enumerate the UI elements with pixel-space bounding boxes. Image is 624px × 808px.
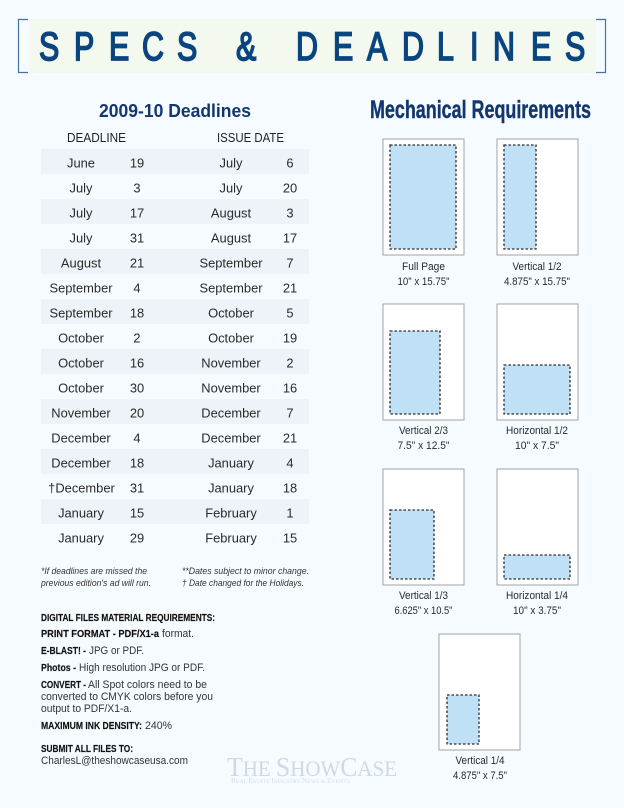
ad size: full page xyxy=(383,139,464,288)
ad size: vertical 1/4: Vertical 1/4 xyxy=(456,755,504,767)
table rows: 29 xyxy=(130,530,144,546)
digital file requirements xyxy=(41,612,215,732)
digital file requirements: Photos - xyxy=(41,662,76,674)
table rows: July xyxy=(220,156,243,170)
table rows: July xyxy=(70,206,93,220)
ad size: horizontal 1/4: Horizontal 1/4 xyxy=(506,590,568,602)
table rows: January xyxy=(58,530,104,546)
table rows: 16 xyxy=(283,380,297,396)
table rows: September xyxy=(49,280,113,296)
table rows: September xyxy=(49,306,113,320)
table rows: 3 xyxy=(286,206,294,220)
table rows: 18 xyxy=(283,480,297,496)
table rows: December xyxy=(51,456,111,470)
table rows: December xyxy=(51,430,111,446)
digital file requirements: E-BLAST! - xyxy=(41,645,86,657)
digital file requirements: DIGITAL FILES MATERIAL REQUIREMENTS: xyxy=(41,612,215,624)
table rows: 20 xyxy=(283,180,297,196)
ad size: horizontal 1/4 xyxy=(497,469,578,617)
table rows: November xyxy=(51,406,111,420)
table rows: 7 xyxy=(286,256,294,270)
table rows: September xyxy=(199,280,263,296)
submission contact: SUBMIT ALL FILES TO: xyxy=(41,743,133,755)
table rows: February xyxy=(205,506,257,520)
ad size: vertical 1/4 xyxy=(439,634,520,782)
table rows: 19 xyxy=(283,330,297,346)
ad size: full page: Full Page xyxy=(402,261,445,273)
table rows: 20 xyxy=(130,406,144,420)
logo: the showcase: THE SHOWCASE xyxy=(227,752,397,782)
table rows: January xyxy=(208,456,254,470)
table rows: †December xyxy=(48,480,116,496)
ad size: horizontal 1/4: 10" x 3.75" xyxy=(513,605,561,617)
table rows: August xyxy=(211,206,251,220)
table rows: October xyxy=(58,380,105,396)
table rows: September xyxy=(199,256,263,270)
ad size: vertical 1/3: 6.625" x 10.5" xyxy=(394,605,453,617)
table rows: December xyxy=(201,406,261,420)
footnotes: previous edition's ad will run. xyxy=(40,578,151,589)
table rows: 5 xyxy=(286,306,294,320)
ad size: vertical 1/2 xyxy=(497,139,578,288)
digital file requirements: High resolution JPG or PDF. xyxy=(79,662,205,674)
table rows: October xyxy=(208,330,255,346)
table rows: November xyxy=(201,356,261,370)
digital file requirements: All Spot colors need to be xyxy=(88,679,207,691)
ad size: vertical 1/3: Vertical 1/3 xyxy=(399,590,448,602)
table rows: February xyxy=(205,530,257,546)
footnotes: † Date changed for the Holidays. xyxy=(182,578,304,589)
ad size: horizontal 1/2 xyxy=(497,304,578,452)
ad size: vertical 1/2: 4.875" x 15.75" xyxy=(504,276,570,288)
ad size: vertical 1/3 xyxy=(383,469,464,617)
table rows: 4 xyxy=(286,456,294,470)
digital file requirements: CONVERT - xyxy=(41,679,86,691)
footnotes: *If deadlines are missed the xyxy=(41,566,147,577)
table rows: October xyxy=(58,330,105,346)
table rows: July xyxy=(70,230,93,246)
ad size: horizontal 1/2: 10" x 7.5" xyxy=(515,440,559,452)
table rows: 15 xyxy=(130,506,144,520)
table rows: January xyxy=(58,506,104,520)
table rows: 21 xyxy=(283,280,297,296)
table rows: 18 xyxy=(130,456,144,470)
table rows: 15 xyxy=(283,530,297,546)
table rows: 21 xyxy=(283,430,297,446)
digital file requirements: format. xyxy=(162,628,194,640)
deadlines table xyxy=(41,131,309,546)
table rows: 17 xyxy=(283,230,297,246)
table rows: 16 xyxy=(130,356,144,370)
table rows: January xyxy=(208,480,254,496)
table rows: August xyxy=(211,230,251,246)
table rows: 31 xyxy=(130,230,144,246)
table rows: 2 xyxy=(286,356,294,370)
table rows: July xyxy=(220,180,243,196)
table rows: 4 xyxy=(133,430,141,446)
footnotes xyxy=(40,566,309,589)
table rows: October xyxy=(58,356,105,370)
table rows: 2 xyxy=(133,330,141,346)
table rows: 3 xyxy=(133,180,141,196)
table rows xyxy=(48,156,297,546)
table rows: 17 xyxy=(130,206,144,220)
table rows: 30 xyxy=(130,380,144,396)
footnotes: **Dates subject to minor change. xyxy=(182,566,309,577)
submission contact: CharlesL@theshowcaseusa.com xyxy=(41,755,188,767)
table rows: July xyxy=(70,180,93,196)
table rows: 31 xyxy=(130,480,144,496)
digital file requirements: MAXIMUM INK DENSITY: xyxy=(41,720,142,732)
table rows: 1 xyxy=(286,506,294,520)
ad size: vertical 2/3: Vertical 2/3 xyxy=(399,425,448,437)
digital file requirements: PRINT FORMAT - PDF/X1-a xyxy=(41,628,159,640)
title: SPECS&DEADLINES xyxy=(39,24,585,69)
digital file requirements: JPG or PDF. xyxy=(89,645,144,657)
ad size: full page: 10" x 15.75" xyxy=(398,276,450,288)
table rows: 7 xyxy=(286,406,294,420)
table rows: June xyxy=(67,156,95,170)
digital file requirements: 240% xyxy=(145,720,172,732)
table rows: December xyxy=(201,430,261,446)
ad size: vertical 1/4: 4.875" x 7.5" xyxy=(453,770,507,782)
table rows: 21 xyxy=(130,256,144,270)
logo: the showcase: REAL ESTATE INDUSTRY NEWS & EVENTS xyxy=(231,777,350,785)
column headers: ISSUE DATE xyxy=(217,131,284,145)
ad size: horizontal 1/2: Horizontal 1/2 xyxy=(506,425,568,437)
ad size: vertical 2/3 xyxy=(383,304,464,452)
column headers: DEADLINE xyxy=(67,131,126,145)
table rows: 6 xyxy=(286,156,294,170)
table rows: October xyxy=(208,306,255,320)
heading: 2009-10 deadlines: 2009-10 Deadlines xyxy=(99,101,251,121)
table rows: 18 xyxy=(130,306,144,320)
digital file requirements: output to PDF/X1-a. xyxy=(41,703,132,715)
table rows: 4 xyxy=(133,280,141,296)
ad size: vertical 1/2: Vertical 1/2 xyxy=(512,261,562,273)
ad size: vertical 2/3: 7.5" x 12.5" xyxy=(398,440,450,452)
table rows: 19 xyxy=(130,156,144,170)
table rows: August xyxy=(61,256,101,270)
title banner xyxy=(18,19,606,73)
submission contact xyxy=(41,743,188,767)
digital file requirements: converted to CMYK colors before you xyxy=(41,691,213,703)
column headers xyxy=(67,131,284,145)
table rows: November xyxy=(201,380,261,396)
